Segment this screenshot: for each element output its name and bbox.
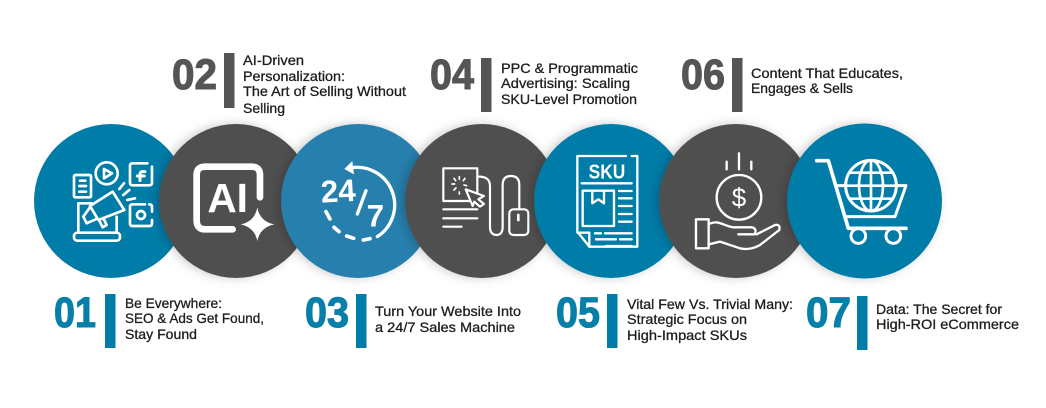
- callout 06: Engages & Sells: [751, 80, 853, 96]
- icon: screen, cursor and mouse: [443, 168, 528, 235]
- callout 02: The Art of Selling Without: [243, 83, 406, 99]
- callout 02: Personalization:: [243, 68, 345, 84]
- callout 05: High-Impact SKUs: [627, 327, 747, 343]
- callout 03: [305, 289, 521, 348]
- icon: 24/7 clock arrow: 24: [320, 173, 357, 210]
- callout 04: 04: [430, 51, 474, 99]
- callout 03: Turn Your Website Into: [375, 303, 521, 319]
- callout 07: Data: The Secret for: [876, 301, 1002, 317]
- callout 05: [556, 289, 793, 348]
- icon: coin over open hand: $: [732, 183, 747, 213]
- callout 03: 03: [305, 289, 349, 337]
- callout 01: [54, 289, 264, 348]
- callout 07: 07: [806, 289, 851, 337]
- callout 05: Strategic Focus on: [627, 311, 747, 327]
- callout 07: High-ROI eCommerce: [876, 316, 1019, 332]
- icon: 24/7 clock arrow: 7: [367, 199, 384, 234]
- callout 04: SKU-Level Promotion: [501, 91, 637, 107]
- icon: SKU document: SKU: [589, 161, 625, 183]
- callout 06: 06: [681, 51, 725, 99]
- step 2 circle: [159, 124, 313, 278]
- callout 04: Advertising: Scaling: [501, 75, 630, 91]
- callout 04: PPC & Programmatic: [501, 60, 638, 76]
- icon: coin over open hand: [696, 153, 780, 249]
- callout 05: 05: [556, 289, 600, 337]
- icon: AI with sparkle: AI: [207, 175, 248, 221]
- callout 01: SEO & Ads Get Found,: [125, 310, 264, 326]
- callout 02: Selling: [243, 100, 285, 116]
- step 4 circle: [405, 124, 559, 278]
- icon: shopping cart with globe: [817, 160, 906, 243]
- callout 02: 02: [172, 51, 217, 99]
- icon: AI with sparkle: [197, 167, 274, 241]
- callout 06: [681, 51, 903, 112]
- step 1 circle: [34, 124, 188, 278]
- step 3 circle: [281, 124, 435, 278]
- step 6 circle: [659, 124, 813, 278]
- callout 05: Vital Few Vs. Trivial Many:: [627, 296, 793, 312]
- step 7 circle: [787, 124, 942, 278]
- callout 01: Be Everywhere:: [125, 295, 222, 311]
- icon: 24/7 clock arrow: [320, 161, 395, 240]
- callout 03: a 24/7 Sales Machine: [375, 319, 515, 335]
- icon: megaphone and social media: [74, 162, 152, 241]
- callout 01: 01: [54, 289, 96, 337]
- callout 06: Content That Educates,: [751, 65, 903, 81]
- icon: SKU document: [577, 156, 637, 247]
- callout 02: AI-Driven: [243, 52, 304, 68]
- callout 07: [806, 289, 1019, 350]
- step 5 circle: [534, 124, 688, 278]
- callout 01: Stay Found: [125, 326, 197, 342]
- callout 02: [172, 51, 406, 116]
- callout 04: [430, 51, 638, 112]
